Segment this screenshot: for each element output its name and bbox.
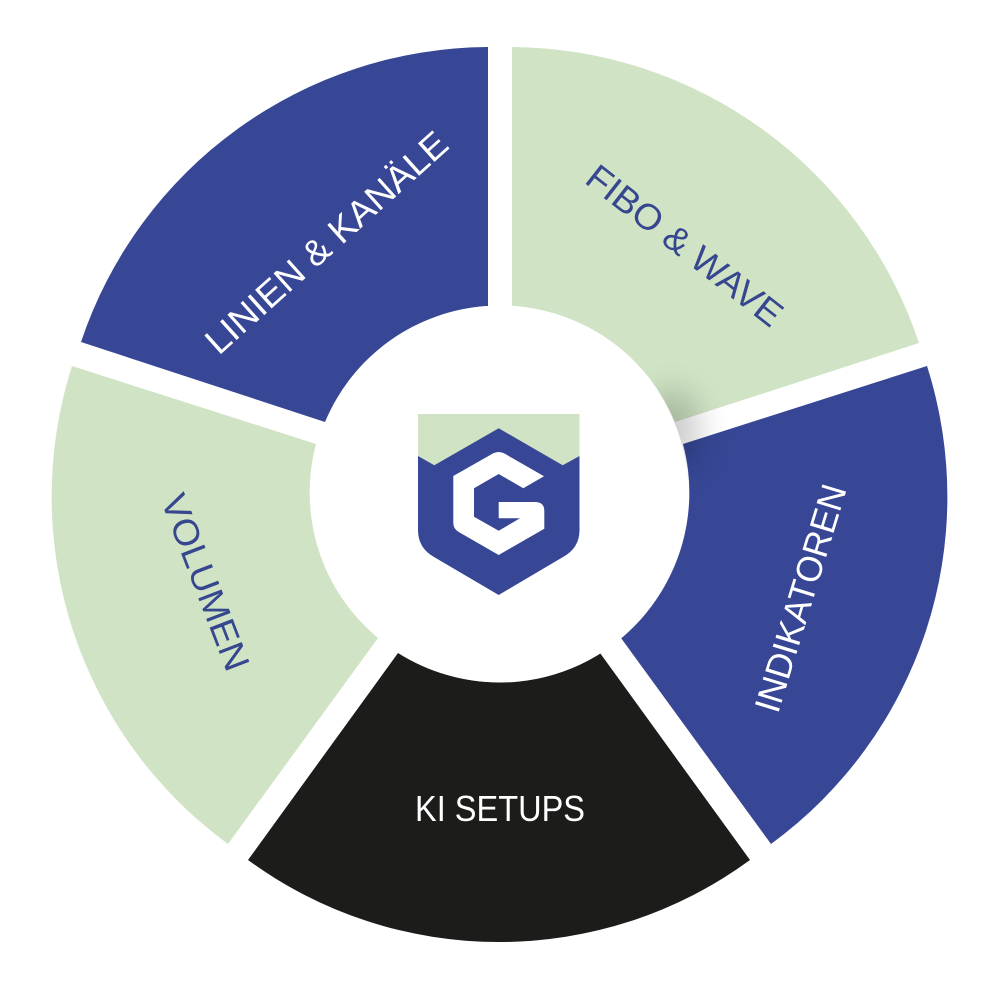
panel: Linien & Kanäle	[81, 47, 488, 422]
panel: Fibo & Wave	[512, 47, 919, 422]
icon: shield logo	[418, 414, 580, 595]
label: Volumen: VOLUMEN	[153, 488, 258, 676]
label: Fibo & Wave: FIBO & WAVE	[578, 156, 791, 335]
center circle	[312, 306, 688, 682]
label: KI Setups: KI SETUPS	[415, 788, 585, 829]
panel: KI Setups	[248, 653, 750, 942]
panel: Volumen	[52, 366, 378, 844]
label: Linien & Kanäle: LINIEN & KANÄLE	[197, 123, 456, 362]
panel: Indikatoren	[621, 366, 947, 844]
label: Indikatoren: INDIKATOREN	[746, 479, 855, 717]
